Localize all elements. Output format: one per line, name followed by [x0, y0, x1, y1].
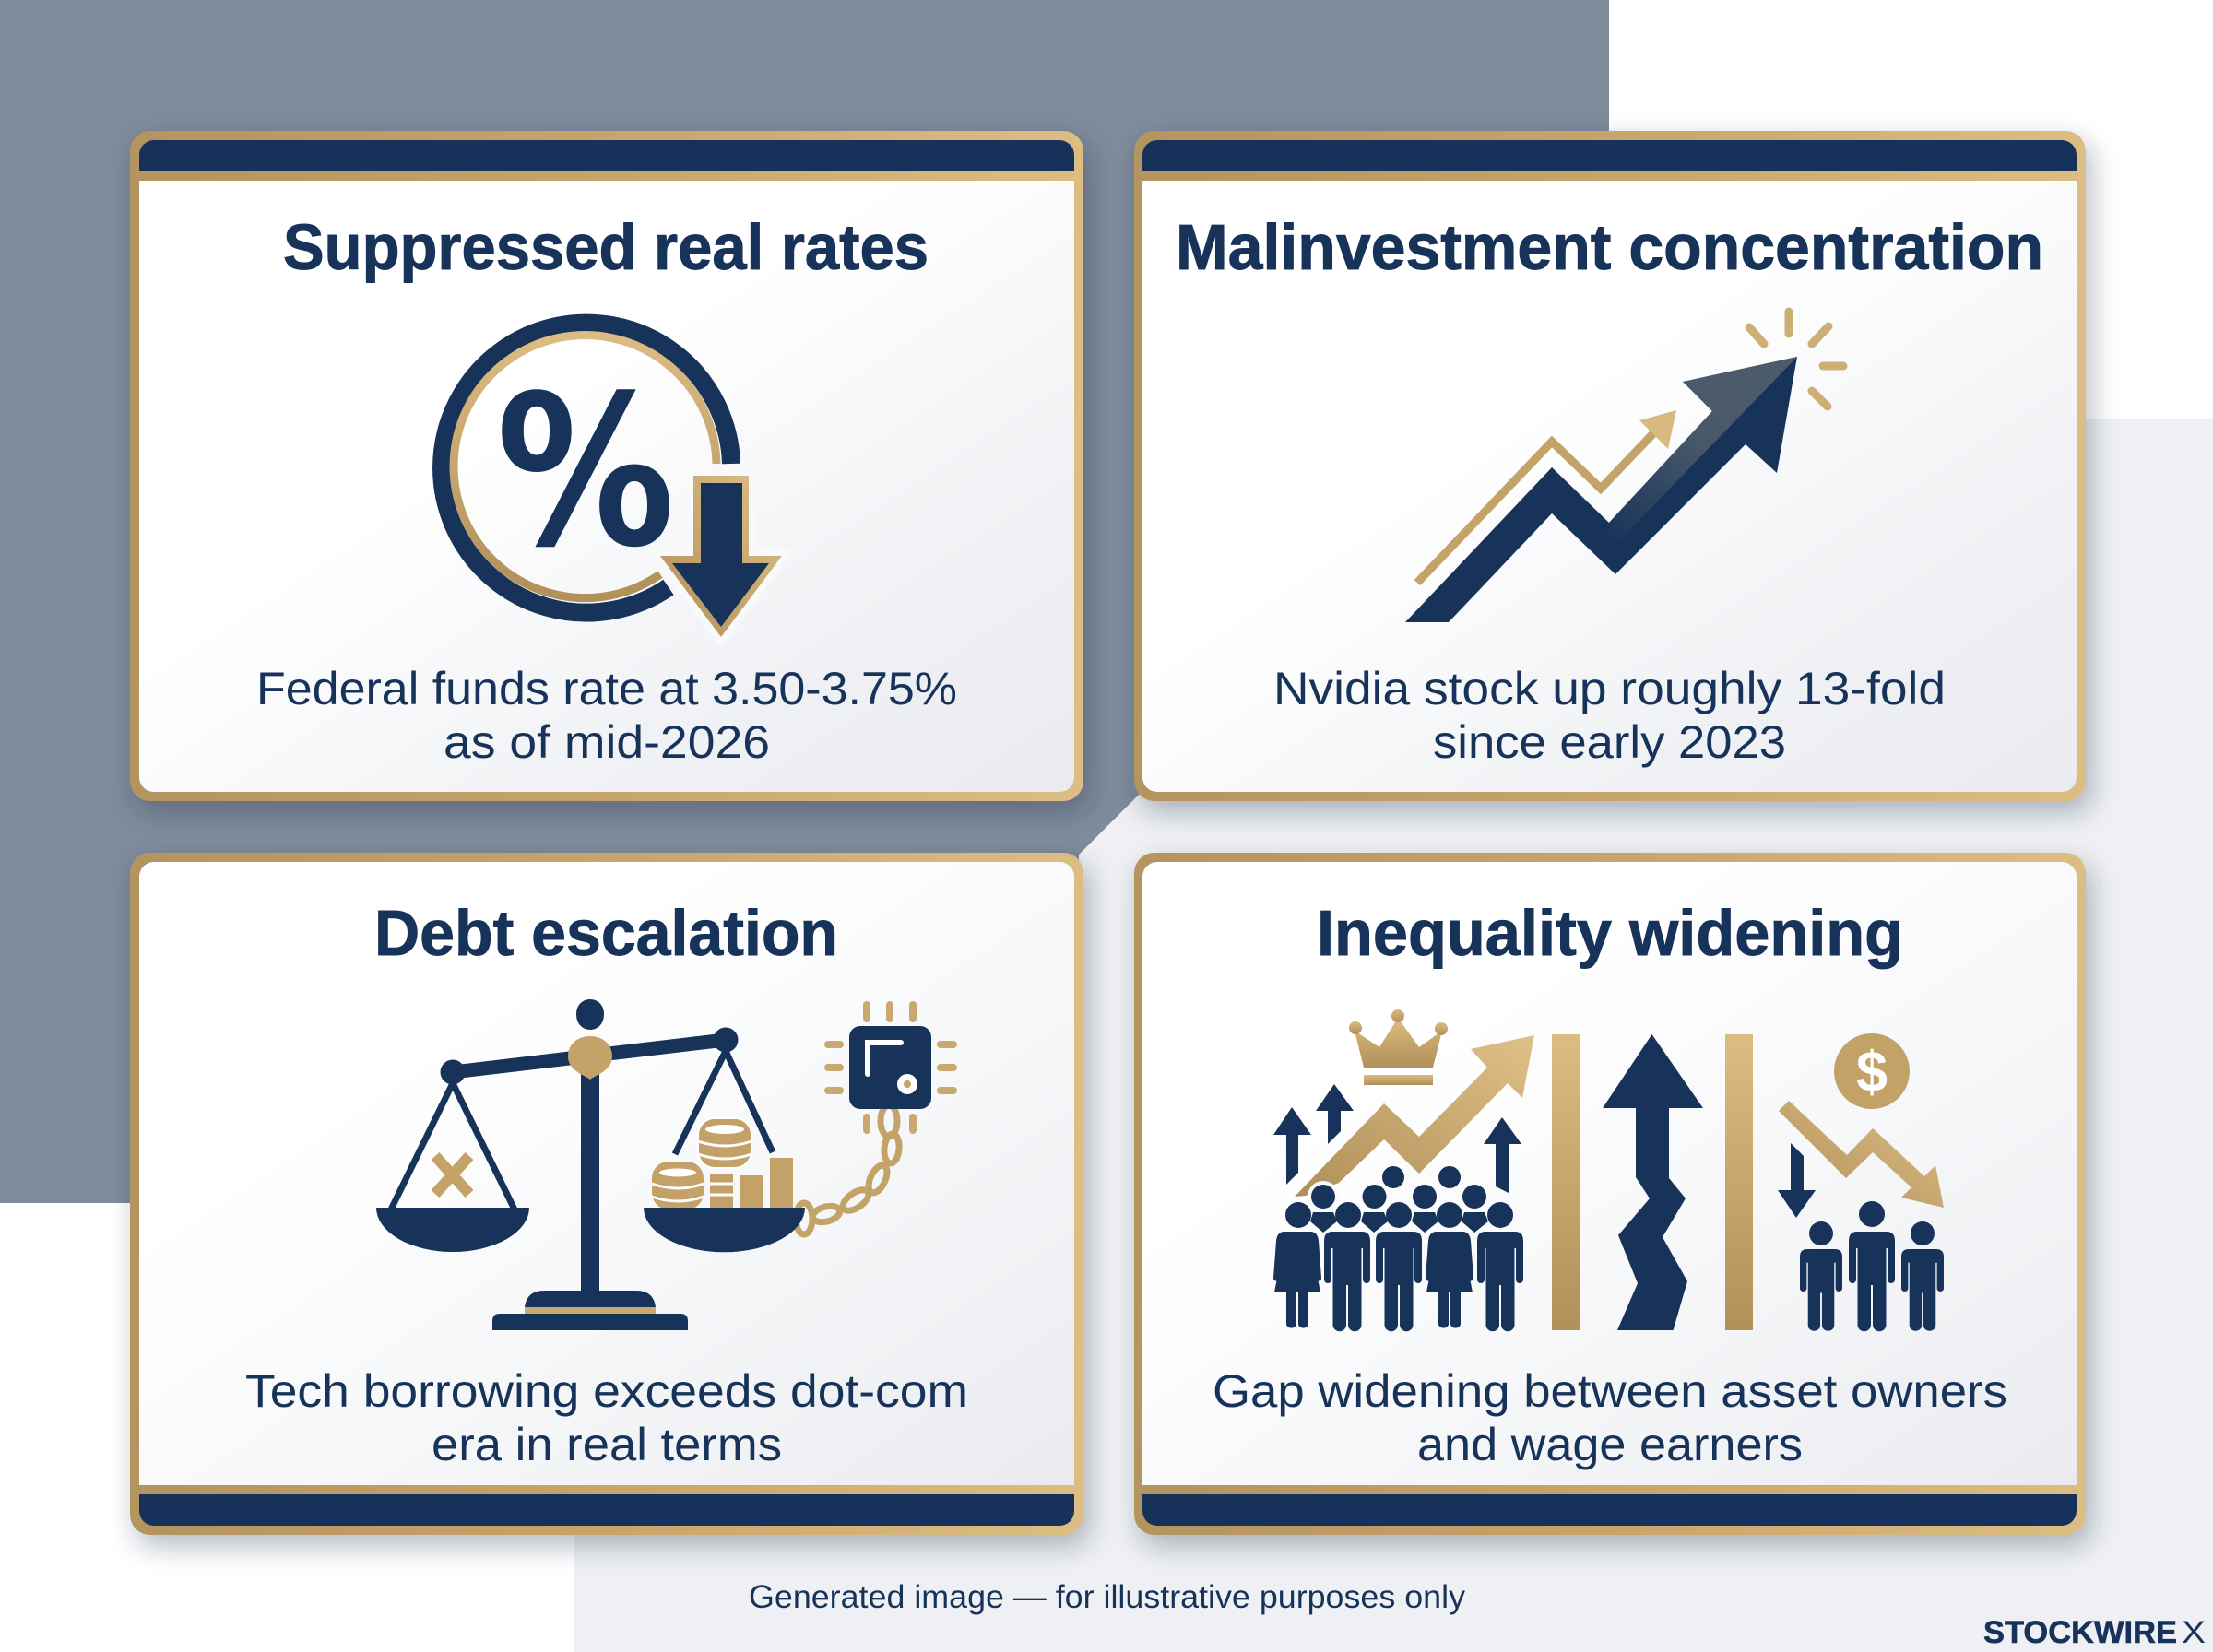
logo: stockwire x: X: [2182, 1615, 2206, 1650]
card frame: [1134, 853, 2086, 1535]
background: light grey block: [574, 419, 2213, 1652]
icon: rising chart arrow: [1405, 312, 1843, 622]
body text: and wage earners: [1417, 1419, 1803, 1470]
panel: suppressed real rates: [130, 131, 1083, 801]
background: slate block: [0, 0, 1609, 1203]
right pan: [675, 1051, 773, 1154]
chain: [796, 1105, 900, 1234]
heading: Malinvestment concentration: [1176, 211, 2043, 283]
coins and bars: [652, 1118, 793, 1210]
left pan: [391, 1083, 515, 1210]
body text: Nvidia stock up roughly 13-fold: [1273, 663, 1946, 714]
icon: up arrows: [1273, 1084, 1521, 1193]
heading: Suppressed real rates: [283, 211, 929, 283]
panel: inequality widening: [1134, 853, 2086, 1535]
body text: as of mid-2026: [444, 716, 770, 768]
chart: gold falling arrow: [1779, 1101, 1944, 1208]
icon: small group of people: [1800, 1201, 1944, 1331]
body text: Federal funds rate at 3.50-3.75%: [256, 663, 957, 714]
card frame: [130, 131, 1083, 801]
logo: stockwire x: STOCKWIRE: [1983, 1615, 2177, 1650]
chip: [828, 1005, 953, 1130]
card frame: [1134, 131, 2086, 801]
icon: crowd of people: [1273, 1166, 1523, 1331]
panel: malinvestment concentration: [1134, 131, 2086, 801]
body text: era in real terms: [432, 1419, 782, 1470]
icon: dollar coin: [1834, 1033, 1910, 1109]
footer note: Generated image — for illustrative purposes only: [749, 1579, 1465, 1615]
body text: [1213, 1365, 2007, 1470]
body text: Gap widening between asset owners: [1213, 1365, 2007, 1417]
icon: percent circle with down arrow: [442, 324, 782, 637]
icon: scale with chip and chain: [376, 999, 953, 1330]
chart: gold rising arrow: [1295, 1035, 1534, 1197]
icon: central jagged up arrow: [1603, 1034, 1703, 1330]
gold pillar right: [1725, 1034, 1753, 1330]
card frame: [130, 853, 1083, 1535]
body text: Tech borrowing exceeds dot-com: [245, 1365, 968, 1417]
beam: [453, 1040, 726, 1072]
icon: percent circle with down arrow: %: [496, 351, 675, 594]
gold pillar left: [1552, 1034, 1580, 1330]
body text: [245, 1365, 968, 1470]
heading: Debt escalation: [374, 897, 838, 969]
pole and base: [581, 1074, 599, 1295]
icon: dollar coin: $: [1856, 1041, 1888, 1104]
panel: debt escalation: [130, 853, 1083, 1535]
icon: crown: [1349, 1009, 1448, 1085]
body text: [256, 663, 957, 768]
body text: [1273, 663, 1946, 768]
icon: down arrow: [1778, 1143, 1816, 1218]
body text: since early 2023: [1433, 716, 1786, 768]
heading: Inequality widening: [1317, 897, 1903, 969]
